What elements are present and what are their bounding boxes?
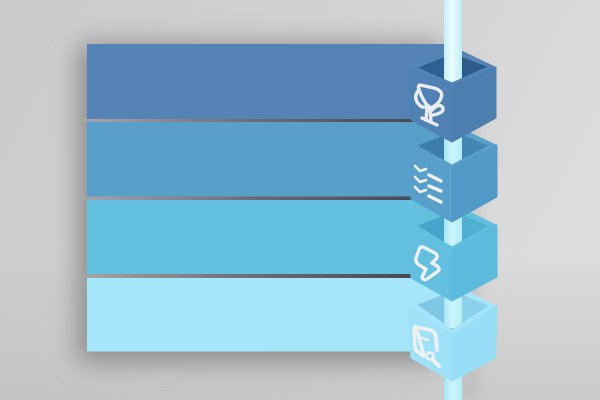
bars drop shadow — [78, 44, 440, 362]
cube 3 back rim and interior — [408, 203, 497, 250]
cube 4 — [408, 283, 497, 381]
cube 3 — [408, 203, 497, 301]
tube — [444, 0, 462, 400]
cube 4 back rim and interior — [408, 283, 497, 335]
panel: bar 4 — [87, 278, 447, 352]
cube 1 — [408, 0, 496, 142]
panel: bar 2 — [87, 122, 447, 196]
cube 2 back rim and interior — [408, 124, 497, 168]
cube 4 sides — [408, 305, 497, 335]
icon: checklist — [415, 166, 441, 202]
cube 1 back rim and interior — [408, 46, 496, 86]
cube 1 sides — [408, 67, 496, 86]
panel: bar 1 — [87, 44, 447, 119]
cube 3 sides — [408, 225, 497, 250]
icon: plant cup — [416, 85, 443, 125]
icon: lightning bolt — [416, 247, 439, 280]
panel: bar 3 — [87, 200, 447, 274]
cube 2 — [408, 124, 497, 222]
bar gaps — [82, 119, 427, 278]
icon: document search — [414, 327, 439, 366]
cube 2 sides — [408, 145, 497, 168]
tube shadow — [462, 60, 478, 400]
